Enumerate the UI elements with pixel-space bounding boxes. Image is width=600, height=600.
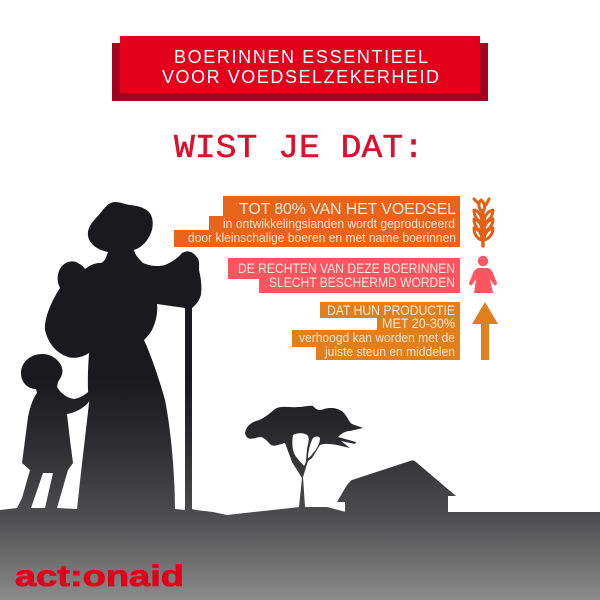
house	[337, 460, 456, 513]
icon: up arrow	[472, 302, 498, 360]
silhouette: ground, woman, child, tree and house	[0, 202, 600, 600]
panel: rights: DE RECHTEN VAN DEZE BOERINNEN	[238, 260, 455, 276]
panel: rights	[228, 258, 460, 293]
panel: 80% of food: door kleinschalige boeren en met name boerinnen	[188, 230, 456, 245]
child	[17, 354, 90, 508]
panel: 80% of food: in ontwikkelingslanden wordt geproduceerd	[223, 216, 455, 231]
title banner	[112, 36, 488, 101]
panel: production: DAT HUN PRODUCTIE	[327, 303, 455, 318]
tree	[245, 406, 363, 507]
panel: production	[292, 302, 460, 360]
heading: wist je dat: WIST JE DAT:	[174, 130, 424, 167]
title banner: BOERINNEN ESSENTIEEL	[174, 47, 428, 67]
icon: woman	[469, 256, 497, 293]
icon: wheat	[474, 199, 493, 246]
panel: 80% of food	[174, 196, 460, 247]
woman with baby and staff	[45, 202, 201, 510]
logo: actionaid: act:onaid	[15, 560, 184, 593]
ground	[0, 507, 600, 600]
panel: production: verhoogd kan worden met de	[299, 330, 455, 345]
panel: production: juiste steun en middelen	[324, 344, 455, 359]
panel: 80% of food: TOT 80% VAN HET VOEDSEL	[239, 201, 456, 218]
panel: production: MET 20-30%	[382, 316, 455, 331]
title banner: VOOR VOEDSELZEKERHEID	[162, 67, 439, 87]
panel: rights: SLECHT BESCHERMD WORDEN	[269, 274, 455, 290]
